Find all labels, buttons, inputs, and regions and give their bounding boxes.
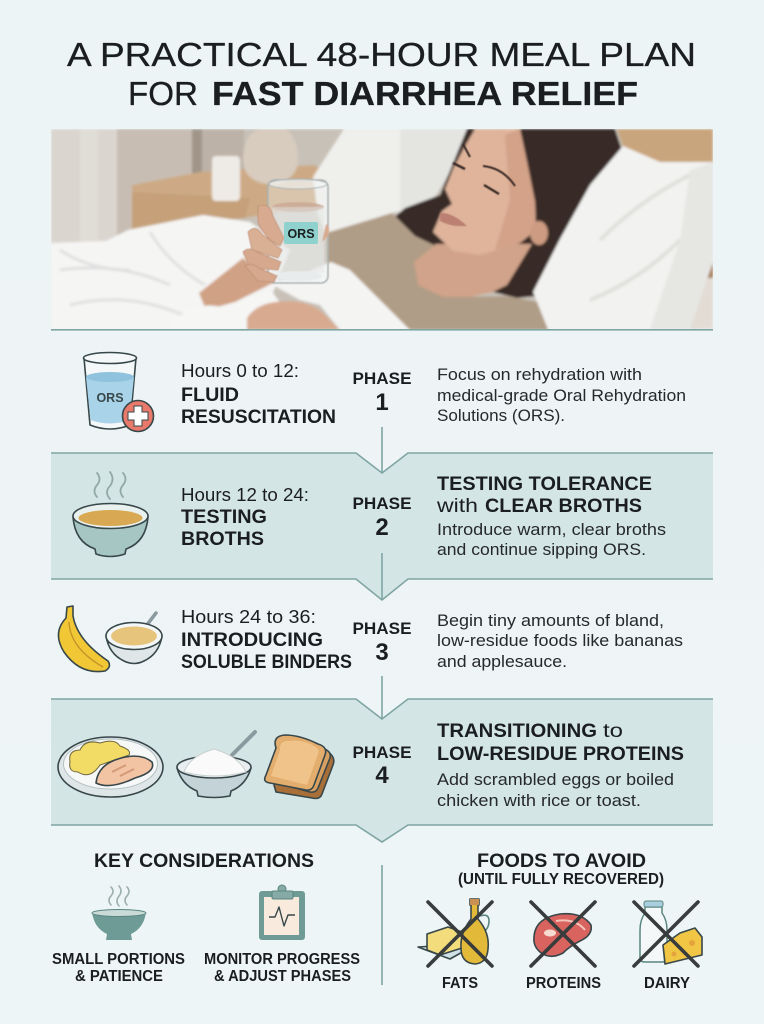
phase 3 description <box>437 612 683 671</box>
phase 1 timing and title <box>181 361 336 428</box>
phase 1 badge: 1 <box>375 389 389 416</box>
panel: phase 4 <box>58 720 684 810</box>
heading: key considerations: KEY CONSIDERATIONS <box>94 850 314 872</box>
divider between bottom panels <box>381 865 383 985</box>
phase 3 timing and title <box>181 607 352 673</box>
phase 3 badge <box>352 619 412 666</box>
label: small portions: & PATIENCE <box>75 968 163 985</box>
arrow: phase 1 to 2 <box>381 427 383 472</box>
phase 2 badge: PHASE <box>352 494 412 513</box>
title: A PRACTICAL 48-HOUR MEAL PLAN <box>67 37 696 74</box>
label: small portions: SMALL PORTIONS <box>52 951 185 968</box>
icon: small bowl with steam <box>92 886 146 940</box>
icon: applesauce bowl <box>106 613 162 664</box>
label: monitor progress: MONITOR PROGRESS <box>204 951 360 968</box>
panel: phase 1 <box>84 352 686 432</box>
phase 1 description <box>437 366 686 425</box>
label: dairy: DAIRY <box>644 975 691 992</box>
title <box>67 37 696 113</box>
phase 1 timing and title: FLUID <box>181 384 239 406</box>
heading: foods to avoid <box>458 850 664 888</box>
phase 2 timing and title: TESTING <box>181 506 267 528</box>
panel: phase 2 band <box>51 453 713 600</box>
phase 2 description: CLEAR BROTHS <box>485 495 642 517</box>
phase 2 badge <box>352 494 412 541</box>
panel: key considerations <box>52 850 360 985</box>
phase 4 badge <box>352 743 412 789</box>
phase 2 description <box>436 473 666 559</box>
icon: toast <box>265 735 334 798</box>
phase 3 timing and title: Hours 24 to 36: <box>181 607 316 627</box>
label: proteins: PROTEINS <box>526 975 601 992</box>
phase 4 description: to <box>603 720 623 742</box>
heading: foods to avoid: (UNTIL FULLY RECOVERED) <box>458 871 664 888</box>
phase 1 badge <box>352 369 412 416</box>
label: fats: FATS <box>442 975 478 992</box>
arrow: phase 3 to 4 <box>381 676 383 718</box>
photo: woman in bed holding a glass of ORS <box>51 129 713 330</box>
phase 2 description: and continue sipping ORS. <box>437 541 646 559</box>
phase 4 description: Add scrambled eggs or boiled <box>437 771 674 789</box>
ORS label on glass: ORS <box>287 227 315 241</box>
phase 2 timing and title: BROTHS <box>181 528 264 550</box>
icon: bowl of broth <box>73 472 148 556</box>
phase 2 timing and title: Hours 12 to 24: <box>181 485 309 505</box>
panel: phase 3 <box>58 606 683 673</box>
panel: phase 2 <box>73 472 666 559</box>
phase 2 description: Introduce warm, clear broths <box>437 521 666 539</box>
label: small portions <box>52 951 185 985</box>
label: monitor progress: & ADJUST PHASES <box>214 968 351 985</box>
phase 4 description: LOW-RESIDUE PROTEINS <box>437 743 684 765</box>
phase 1 timing and title: RESUSCITATION <box>181 406 336 428</box>
icon: red meat crossed out <box>531 902 595 966</box>
phase 1 description: Focus on rehydration with <box>437 366 642 384</box>
heading: foods to avoid: FOODS TO AVOID <box>477 850 646 872</box>
icon: fats crossed out <box>418 899 492 966</box>
title: FOR <box>128 76 198 113</box>
phase 3 timing and title: INTRODUCING <box>181 629 323 651</box>
phase 4 description: chicken with rice or toast. <box>437 792 641 810</box>
phase 1 timing and title: Hours 0 to 12: <box>181 361 299 381</box>
icon: clipboard with heartbeat <box>259 885 305 940</box>
phase 3 description: and applesauce. <box>437 653 567 671</box>
phase 3 description: Begin tiny amounts of bland, <box>437 612 664 630</box>
phase 3 badge: PHASE <box>352 619 412 638</box>
icon: ORS glass with medical cross: ORS <box>96 391 124 405</box>
panel: phase 4 band <box>51 699 713 842</box>
phase 1 description: medical-grade Oral Rehydration <box>437 387 686 405</box>
phase 2 description: TESTING TOLERANCE <box>437 473 652 495</box>
phase 4 description: TRANSITIONING <box>437 720 597 742</box>
phase 2 timing and title <box>181 485 309 550</box>
phase 2 badge: 2 <box>375 514 389 541</box>
icon: rice bowl <box>177 732 255 798</box>
icon: ORS glass with medical cross <box>84 352 154 432</box>
phase 4 badge: PHASE <box>352 743 412 762</box>
title: FAST DIARRHEA RELIEF <box>212 76 638 113</box>
icon: dairy crossed out <box>634 901 702 966</box>
phase 3 description: low-residue foods like bananas <box>437 632 683 650</box>
phase 4 description <box>437 720 684 810</box>
phase 1 badge: PHASE <box>352 369 412 388</box>
icon: banana <box>58 606 109 672</box>
arrow: phase 2 to 3 <box>381 553 383 599</box>
phase 1 description: Solutions (ORS). <box>437 407 565 425</box>
phase 2 description: with <box>436 495 478 517</box>
ORS label on glass <box>284 222 318 244</box>
phase 3 badge: 3 <box>375 639 389 666</box>
fingers <box>322 224 329 242</box>
phase 4 badge: 4 <box>375 762 389 789</box>
panel: foods to avoid <box>418 850 702 992</box>
label: monitor progress <box>204 951 360 985</box>
icon: plate with eggs and chicken <box>58 737 163 797</box>
phase 3 timing and title: SOLUBLE BINDERS <box>181 651 352 673</box>
